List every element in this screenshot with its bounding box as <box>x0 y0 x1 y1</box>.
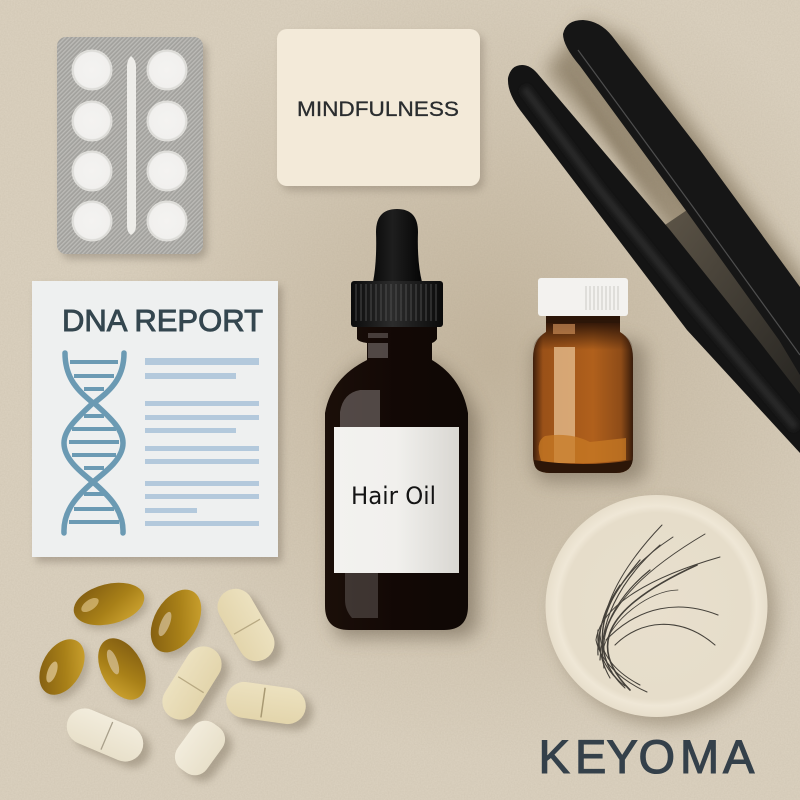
hair strands <box>596 525 720 692</box>
hair oil dropper bottle: Hair Oil <box>351 482 436 510</box>
gap shadow between plates <box>665 210 800 395</box>
report text lines <box>145 358 259 526</box>
upper arm <box>563 20 800 375</box>
amber pill jar <box>533 278 646 482</box>
dropper collar <box>351 281 443 327</box>
bottle glass <box>325 327 468 630</box>
bottle label <box>334 427 459 573</box>
report title: DNA REPORT <box>62 303 263 338</box>
mindfulness card <box>277 29 484 191</box>
dropper bulb <box>373 209 422 282</box>
KEYOMA brand wordmark: KEYOMA <box>538 730 755 783</box>
ceramic dish with hair <box>546 495 775 725</box>
flat iron <box>508 20 800 453</box>
lower arm <box>508 65 800 453</box>
DNA helix icon <box>64 353 124 533</box>
white cap <box>538 278 628 316</box>
hair oil dropper bottle <box>325 209 478 638</box>
mindfulness card: MINDFULNESS <box>297 98 459 121</box>
softgel capsules <box>30 576 216 713</box>
DNA report sheet <box>32 281 282 562</box>
blister pack <box>57 37 207 259</box>
vitamin tablets <box>61 582 315 787</box>
